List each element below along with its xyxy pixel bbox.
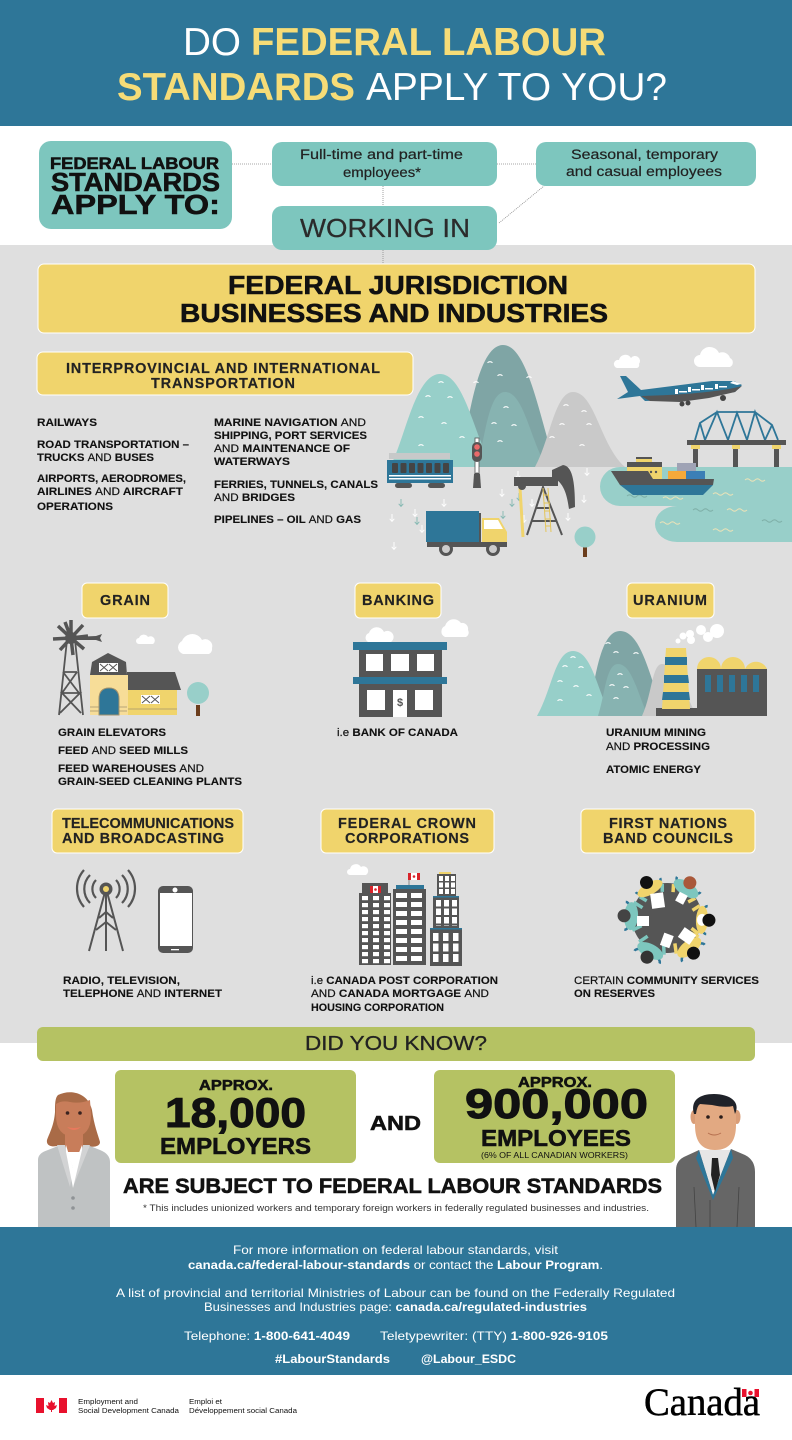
- text: telecom details: [63, 975, 222, 1000]
- footer contact information: canada.ca/federal-labour-standards or contact the Labour Program .: [188, 1258, 603, 1272]
- text: transportation list left: [37, 417, 189, 513]
- text: transportation list right: MARINE NAVIGATION AND: [214, 417, 366, 429]
- illustration: man: [676, 1094, 755, 1227]
- label: uranium: [627, 583, 714, 618]
- dotted connectors: [232, 164, 544, 264]
- text: transportation list right: WATERWAYS: [214, 456, 290, 468]
- title: STANDARDS: [117, 66, 355, 109]
- illustration: water: [600, 467, 792, 542]
- text: grain details: GRAIN-SEED CLEANING PLANTS: [58, 776, 242, 788]
- text: transportation list right: PIPELINES – OIL AND GAS: [214, 514, 361, 526]
- panel: working in: WORKING IN: [300, 213, 470, 243]
- icon: radio tower: [77, 870, 135, 951]
- text: transportation list left: OPERATIONS: [37, 501, 113, 513]
- text: telecom details: RADIO, TELEVISION,: [63, 975, 180, 987]
- panel: full-time and part-time employees: employees*: [343, 165, 422, 180]
- illustration: clouds: [614, 347, 733, 368]
- footer contact information: For more information on federal labour standards, visit: [233, 1243, 559, 1257]
- text: telecom details: TELEPHONE AND INTERNET: [63, 988, 222, 1000]
- footer contact information: [116, 1243, 675, 1366]
- panel: working in: [272, 206, 497, 250]
- title: [117, 21, 667, 109]
- label: first nations band councils: BAND COUNCILS: [603, 831, 733, 847]
- text: uranium details: [606, 727, 710, 776]
- text: transportation list left: ROAD TRANSPORTATION –: [37, 439, 189, 451]
- text: first nations details: ON RESERVES: [574, 988, 655, 1000]
- label: telecommunications and broadcasting: TELECOMMUNICATIONS: [62, 816, 234, 832]
- grey sectors background: [0, 245, 792, 1043]
- illustration: barn: [90, 653, 181, 715]
- panel: federal labour standards apply to: APPLY TO:: [51, 189, 220, 220]
- illustration: train car: [387, 453, 453, 488]
- label: first nations band councils: [581, 809, 755, 853]
- illustration: airplane: [617, 376, 742, 406]
- text: uranium details: ATOMIC ENERGY: [606, 764, 702, 776]
- stat: 18,000 employers: EMPLOYERS: [160, 1133, 311, 1159]
- panel: federal labour standards apply to: [39, 141, 232, 229]
- stat: 900,000 employees: EMPLOYEES: [481, 1125, 631, 1151]
- illustration: grain tree and clouds: [136, 634, 212, 716]
- footer contact information: Businesses and Industries page: canada.ca/regulated-industries: [204, 1300, 587, 1314]
- text: transportation list right: SHIPPING, PORT SERVICES: [214, 430, 367, 442]
- stat: 18,000 employers: 18,000: [165, 1089, 306, 1136]
- label: uranium: URANIUM: [633, 593, 707, 609]
- panel: seasonal, temporary and casual employees: Seasonal, temporary: [571, 147, 718, 162]
- label: federal crown corporations: CORPORATIONS: [345, 831, 469, 847]
- text: uranium details: AND PROCESSING: [606, 741, 710, 753]
- title: FEDERAL LABOUR: [251, 21, 606, 64]
- logo: government signature: Emploi et: [189, 1399, 222, 1406]
- text: transportation list left: AIRPORTS, AERODROMES,: [37, 473, 186, 485]
- heading: federal jurisdiction: BUSINESSES AND INDUSTRIES: [180, 298, 608, 328]
- stat: 900,000 employees: [434, 1070, 675, 1163]
- panel: full-time and part-time employees: [272, 142, 497, 186]
- panel: full-time and part-time employees: Full-time and part-time: [300, 147, 463, 162]
- heading: federal jurisdiction: FEDERAL JURISDICTION: [228, 270, 568, 300]
- text: grain details: FEED AND SEED MILLS: [58, 745, 188, 757]
- logo: government signature: [36, 1398, 297, 1415]
- logo: government signature: Développement social Canada: [189, 1408, 297, 1415]
- stat: 18,000 employers: APPROX.: [199, 1077, 273, 1094]
- panel: federal labour standards apply to: STANDARDS: [51, 167, 220, 197]
- stat: 18,000 employers: [115, 1070, 356, 1163]
- logo: government signature: Social Development Canada: [78, 1408, 179, 1415]
- logo: government signature: Employment and: [78, 1399, 138, 1406]
- footer contact information: Teletypewriter: (TTY) 1-800-926-9105: [380, 1329, 608, 1343]
- footer contact information: #LabourStandards: [275, 1352, 390, 1366]
- illustration: windmill: [53, 620, 102, 715]
- stat: 900,000 employees: (6% OF ALL CANADIAN WORKERS): [481, 1151, 628, 1160]
- label: interprovincial transportation: [37, 352, 413, 395]
- label: federal crown corporations: FEDERAL CROWN: [338, 816, 476, 832]
- text: transportation list right: AND BRIDGES: [214, 492, 295, 504]
- panel: seasonal, temporary and casual employees: [536, 142, 756, 186]
- panel: federal labour standards apply to: FEDERAL LABOUR: [50, 155, 219, 173]
- text: crown corporation details: HOUSING CORPORATION: [311, 1002, 444, 1014]
- label: banking: BANKING: [362, 593, 434, 609]
- top white band: [0, 126, 792, 245]
- text: subject to federal labour standards: ARE SUBJECT TO FEDERAL LABOUR STANDARDS: [123, 1175, 662, 1198]
- text: grain details: FEED WAREHOUSES AND: [58, 763, 204, 775]
- illustration: woman: [38, 1092, 110, 1227]
- heading: did you know: DID YOU KNOW?: [305, 1032, 487, 1055]
- label: telecommunications and broadcasting: AND BROADCASTING: [62, 831, 224, 847]
- text: crown corporation details: i.e CANADA POST CORPORATION: [311, 975, 498, 987]
- text: crown corporation details: [311, 975, 498, 1014]
- heading: did you know: [37, 1027, 755, 1061]
- text: and: AND: [370, 1113, 421, 1135]
- text: transportation list right: AND MAINTENANCE OF: [214, 443, 350, 455]
- footer contact information: A list of provincial and territorial Ministries of Labour can be found on the Federally Regulated: [116, 1286, 675, 1300]
- logo: Canada wordmark: Canada: [644, 1381, 760, 1424]
- label: grain: [82, 583, 168, 618]
- text: banking details: i.e BANK OF CANADA: [337, 727, 458, 739]
- text: transportation list left: TRUCKS AND BUSES: [37, 452, 154, 464]
- footer band: [0, 1227, 792, 1375]
- label: grain: GRAIN: [100, 593, 150, 609]
- illustration: mountains: [390, 345, 625, 467]
- illustration: railway signal: [472, 438, 482, 488]
- icon: smartphone: [158, 886, 193, 953]
- heading: federal jurisdiction: [38, 264, 755, 333]
- label: interprovincial transportation: TRANSPORTATION: [151, 376, 295, 392]
- text: grain details: GRAIN ELEVATORS: [58, 727, 166, 739]
- illustration: meeting table: [617, 870, 716, 969]
- stat: 900,000 employees: 900,000: [465, 1080, 648, 1127]
- text: transportation list right: FERRIES, TUNNELS, CANALS: [214, 479, 378, 491]
- illustration: uranium mountains and plant: [537, 624, 767, 716]
- text: crown corporation details: AND CANADA MORTGAGE AND: [311, 988, 489, 1000]
- illustration: crown corporation towers: [347, 864, 462, 966]
- text: uranium details: URANIUM MINING: [606, 727, 706, 739]
- illustration: tree: [574, 526, 596, 557]
- footnote: * This includes unionized workers and temporary foreign workers in federally regulated businesses and industries.: [143, 1203, 649, 1214]
- label: first nations band councils: FIRST NATIONS: [609, 816, 727, 832]
- text: transportation list left: AIRLINES AND AIRCRAFT: [37, 486, 183, 498]
- illustration: bank building: [353, 619, 469, 717]
- label: telecommunications and broadcasting: [52, 809, 243, 853]
- illustration: cargo ship: [611, 457, 714, 495]
- illustration: bank building: $: [397, 697, 403, 709]
- label: interprovincial transportation: INTERPROVINCIAL AND INTERNATIONAL: [66, 361, 380, 377]
- header band: [0, 0, 792, 126]
- illustration: snow arrows: [390, 468, 589, 549]
- text: first nations details: [574, 975, 759, 1000]
- illustration: bridge: [687, 412, 786, 467]
- label: banking: [355, 583, 441, 618]
- text: grain details: [58, 727, 242, 788]
- stat: 900,000 employees: APPROX.: [518, 1074, 592, 1091]
- footer contact information: Telephone: 1-800-641-4049: [184, 1329, 350, 1343]
- text: transportation list left: RAILWAYS: [37, 417, 97, 429]
- illustration: delivery truck: [426, 511, 507, 556]
- title: APPLY TO YOU?: [366, 66, 667, 109]
- text: first nations details: CERTAIN COMMUNITY SERVICES: [574, 975, 759, 987]
- text: transportation list right: [214, 417, 378, 526]
- panel: seasonal, temporary and casual employees: and casual employees: [566, 164, 722, 179]
- label: federal crown corporations: [321, 809, 494, 853]
- title: DO: [183, 21, 241, 64]
- illustration: oil pump jack: [514, 465, 575, 537]
- footer contact information: @Labour_ESDC: [421, 1352, 516, 1366]
